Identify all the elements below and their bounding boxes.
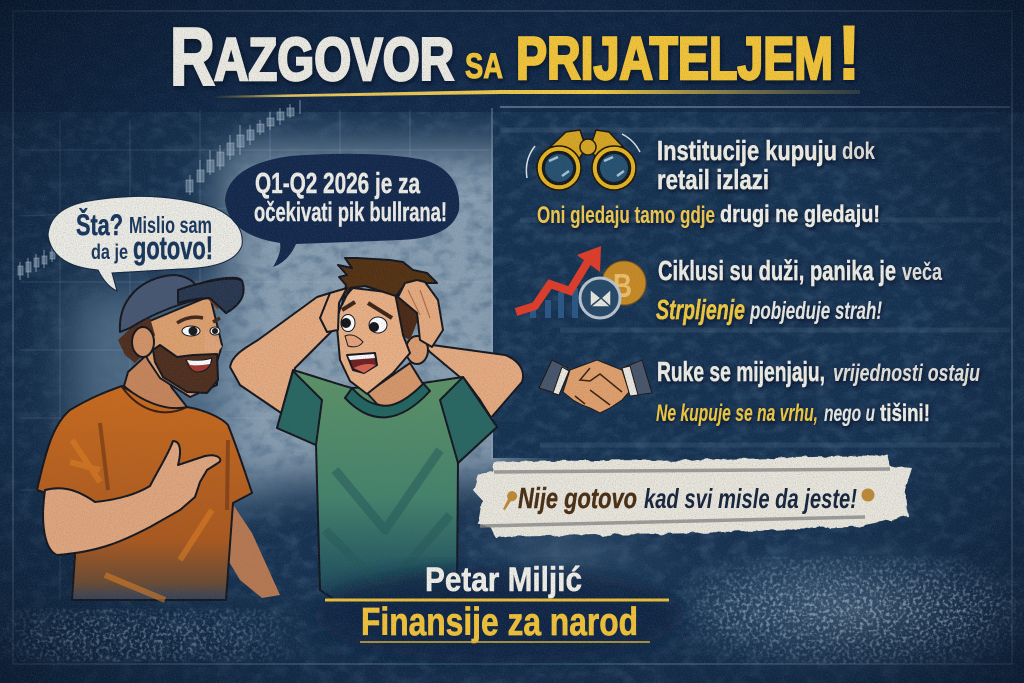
speech bubble: main message: Q1-Q2 2026 je za	[255, 168, 421, 200]
speech bubble: friend: Šta?	[76, 208, 123, 242]
left raised arm	[230, 293, 338, 417]
hair back	[392, 290, 418, 340]
open mouth	[347, 353, 377, 373]
banner text: kad svi misle da jeste!	[644, 483, 857, 514]
panel: key points	[516, 130, 990, 439]
point 1 text: drugi ne gledaju!	[720, 201, 880, 228]
title: PRIJATELJEM	[516, 25, 833, 92]
cap	[120, 275, 244, 332]
icon: left ornament	[503, 491, 517, 510]
icon: rising arrow with coins: B	[613, 267, 632, 304]
footer: author	[315, 561, 685, 663]
point 1 text: dok	[842, 138, 876, 165]
title	[170, 11, 860, 103]
title underline	[212, 90, 860, 98]
torn paper banner	[473, 455, 912, 537]
icon: rising arrow with coins	[516, 246, 646, 318]
head	[133, 296, 222, 397]
point 3 text: Ne kupuje se na vrhu,	[656, 400, 818, 427]
point 2 text: Strpljenje	[656, 294, 745, 325]
eyes	[341, 314, 355, 332]
point 1 text	[537, 135, 880, 229]
point 2 text: pobjeduje strah!	[749, 297, 882, 325]
nose	[205, 330, 222, 351]
ear	[406, 336, 428, 364]
green shirt	[277, 370, 497, 600]
point 3 text: Ruke se mijenjaju,	[657, 356, 825, 387]
dusty ground speckle	[10, 565, 1010, 657]
beard	[153, 345, 218, 393]
title: SA	[465, 47, 503, 86]
icon: binoculars	[526, 130, 640, 190]
footer: author: Finansije za narod	[361, 601, 638, 644]
point 1 text: retail izlazi	[657, 164, 769, 195]
banner text: Nije gotovo	[518, 483, 637, 515]
eyes	[182, 326, 200, 336]
title: !	[838, 11, 860, 96]
pointing arm and hand	[43, 441, 220, 555]
hair	[338, 258, 437, 305]
orange shirt	[37, 386, 252, 600]
right raised arm	[420, 340, 523, 427]
title: AZGOVOR	[214, 26, 454, 93]
speech bubble: friend: da je	[91, 241, 128, 264]
his left arm	[228, 503, 280, 598]
hair	[118, 318, 155, 363]
icon: handshake	[539, 360, 652, 413]
face	[337, 288, 410, 394]
point 2 text: veča	[902, 259, 942, 286]
point 2 text	[656, 255, 942, 325]
point 3 text: tišini!	[880, 400, 930, 427]
title: R	[170, 12, 215, 103]
icon: right ornament	[862, 488, 874, 502]
point 1 text: Oni gledaju tamo gdje	[537, 202, 715, 229]
speech bubble: friend: Mislio sam	[129, 212, 212, 238]
speech bubble: friend: gotovo!	[133, 230, 213, 266]
point 3 text: nego u	[824, 400, 875, 426]
neck	[367, 363, 423, 406]
candlestick chart background	[18, 100, 300, 280]
ear	[132, 327, 154, 357]
banner text	[518, 483, 857, 515]
man in green shirt	[230, 258, 523, 600]
speech bubble: main message	[225, 154, 459, 267]
point 1 text: Institucije kupuju	[657, 135, 837, 166]
mouth	[186, 358, 212, 372]
neck	[124, 350, 187, 408]
point 3 text	[656, 356, 980, 427]
point 2 text: Ciklusi su duži, panika je	[658, 255, 896, 286]
speech bubble: main message: očekivati pik bullrana!	[254, 197, 447, 227]
nose	[345, 335, 363, 347]
right hand	[398, 280, 443, 347]
man in orange shirt	[37, 275, 280, 600]
left hand	[320, 288, 347, 332]
footer: author: Petar Miljić	[425, 561, 582, 599]
speech bubble: friend	[48, 196, 242, 291]
